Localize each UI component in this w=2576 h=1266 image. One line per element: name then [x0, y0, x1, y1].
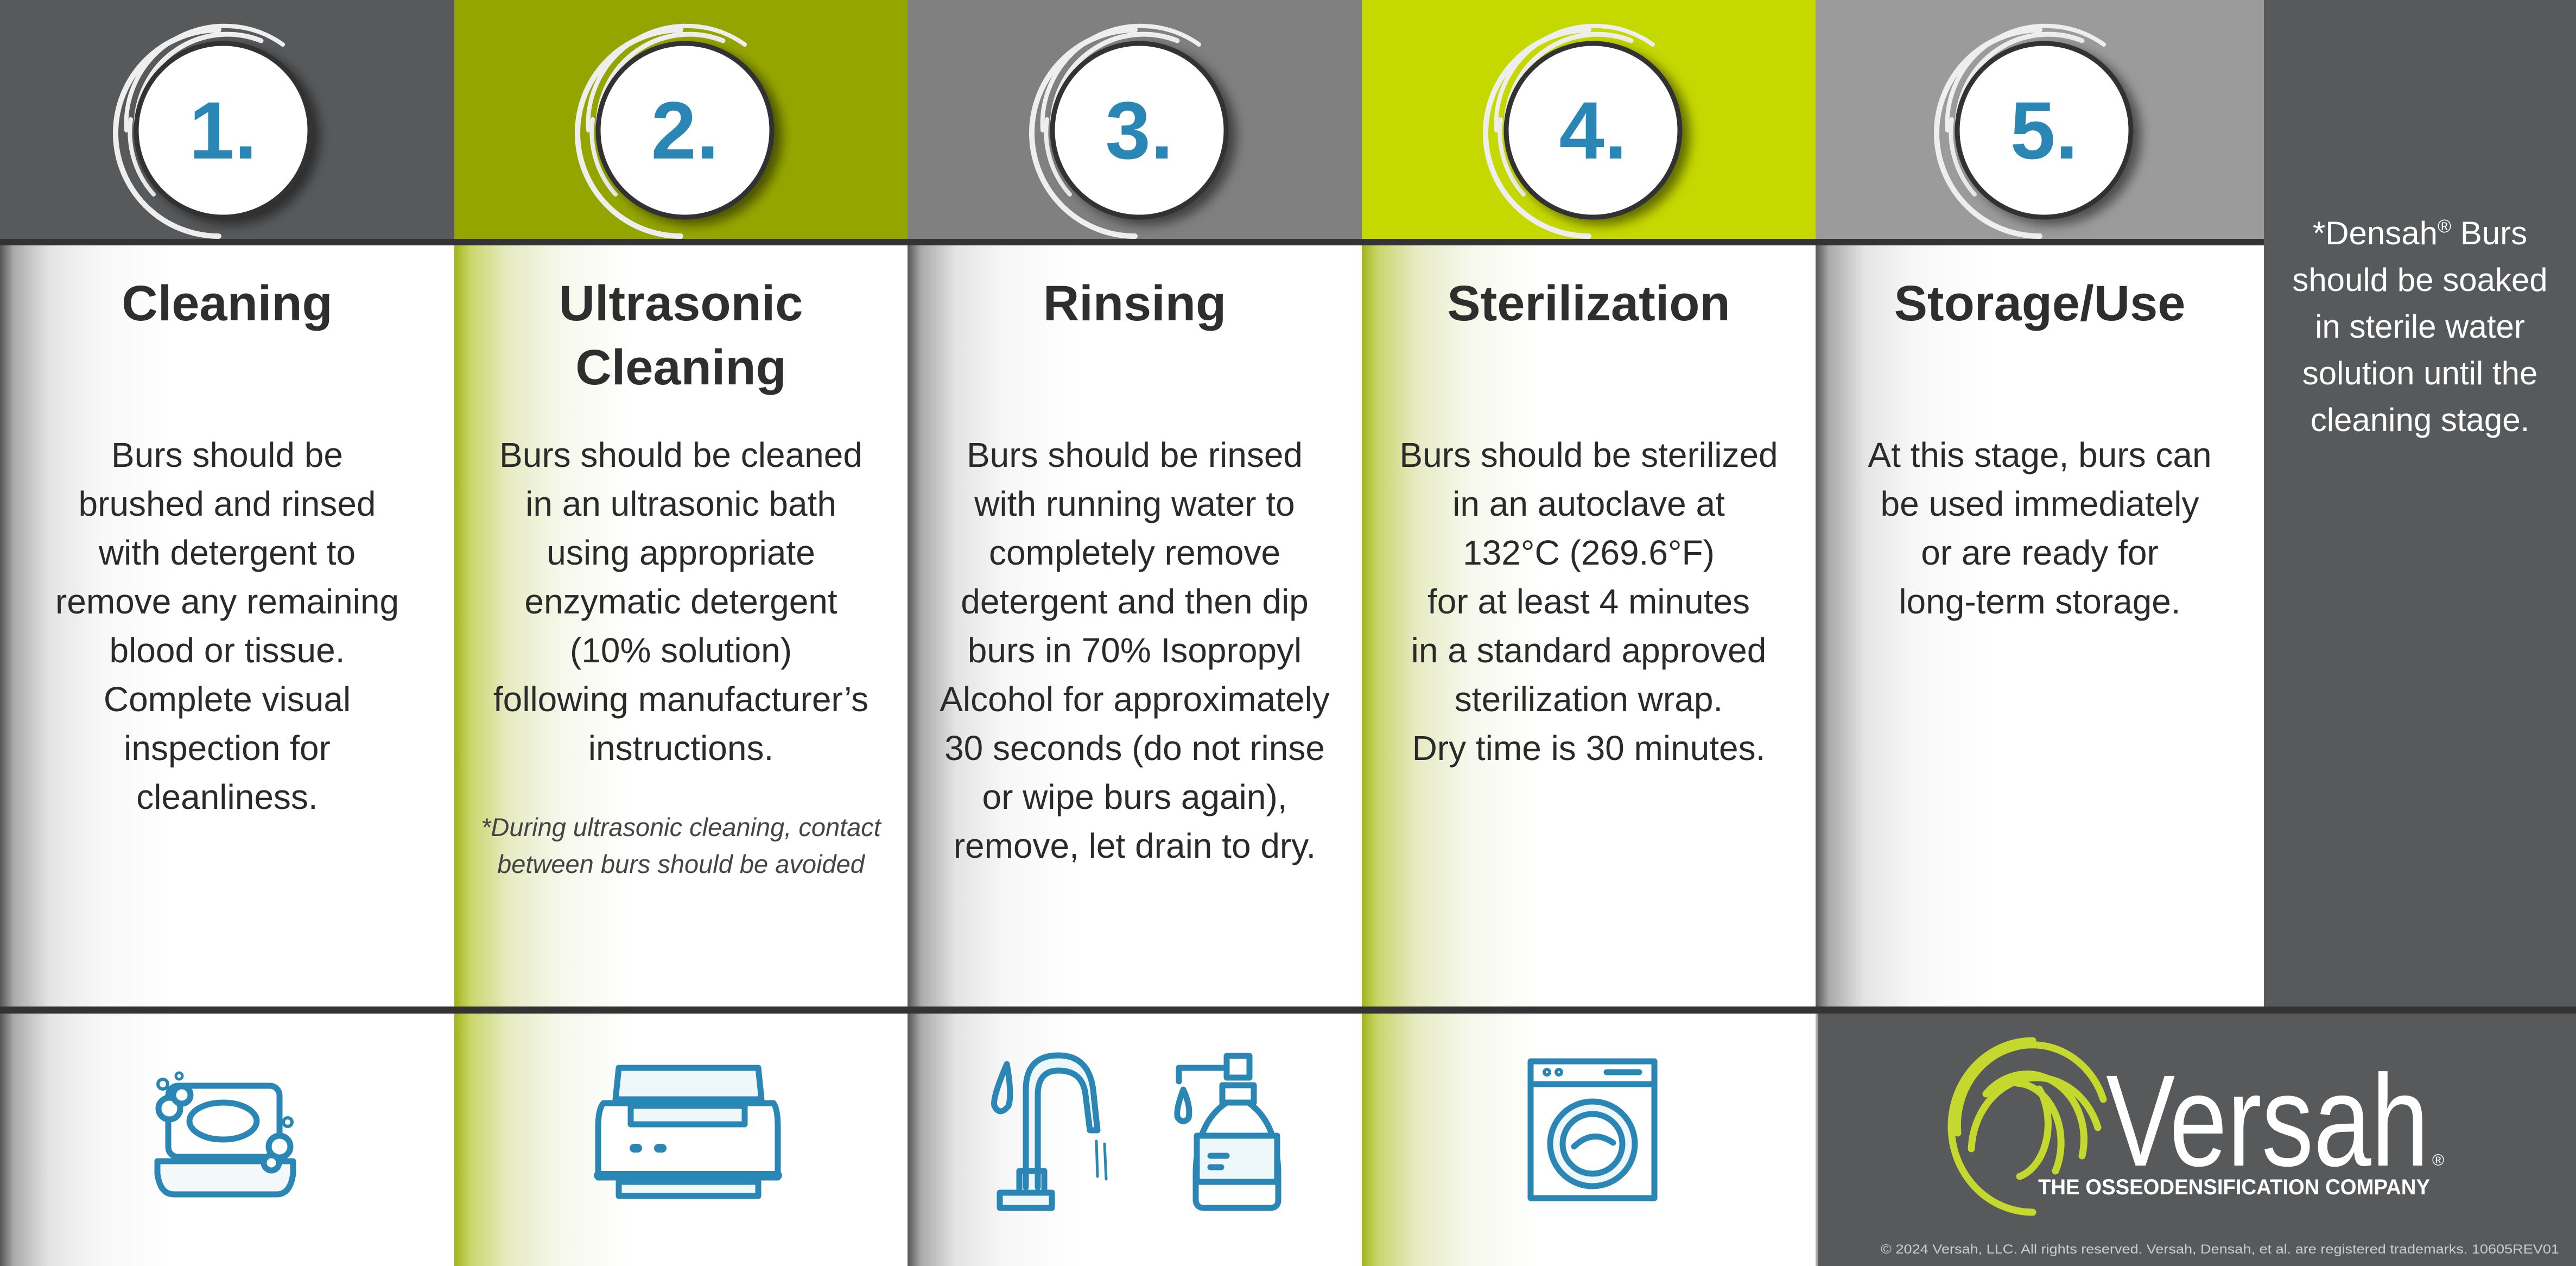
text: rinsing: or wipe burs again), — [982, 777, 1287, 816]
text: ultrasonic: (10% solution) — [570, 631, 792, 670]
dark divider top — [0, 239, 2264, 245]
text: cleaning: blood or tissue. — [109, 631, 345, 670]
bottom logo panel — [1816, 1014, 2576, 1266]
badge 3 — [1032, 26, 1226, 236]
text: sterilization: in an autoclave at — [1452, 484, 1725, 523]
title: Storage/Use: Storage/Use — [1894, 276, 2185, 331]
sidebar note — [2292, 215, 2548, 438]
body columns — [0, 245, 454, 1007]
text: cleaning: Complete visual — [104, 680, 351, 719]
icon: bottle — [1177, 1056, 1278, 1208]
sidebar note: cleaning stage. — [2311, 402, 2529, 438]
text: rinsing: with running water to — [974, 484, 1295, 523]
icons — [154, 1052, 1658, 1211]
badge 4 — [1486, 26, 1680, 236]
text: ultrasonic: in an ultrasonic bath — [525, 484, 836, 523]
badge 1 — [116, 26, 310, 236]
sidebar note: *Densah® Burs — [2313, 215, 2527, 251]
icon: autoclave / washing machine — [1531, 1061, 1654, 1198]
text: ultrasonic: instructions. — [588, 729, 773, 768]
text: storage: At this stage, burs can — [1868, 435, 2212, 474]
text: storage: long-term storage. — [1899, 582, 2181, 621]
text: storage: or are ready for — [1921, 533, 2159, 572]
text: cleaning: inspection for — [124, 729, 331, 768]
header: column 3 — [908, 0, 1362, 239]
badge 2: 2. — [651, 85, 719, 176]
text: cleaning: remove any remaining — [55, 582, 399, 621]
badge 2 — [578, 26, 772, 236]
text: rinsing: completely remove — [989, 533, 1280, 572]
text: cleaning: Burs should be — [111, 435, 343, 474]
text: rinsing: burs in 70% Isopropyl — [968, 631, 1302, 670]
icon: soap — [157, 1073, 293, 1194]
number badges — [113, 24, 2147, 239]
badge 5: 5. — [2010, 85, 2078, 176]
text: sterilization: sterilization wrap. — [1455, 680, 1723, 719]
badge 5 — [1937, 26, 2131, 236]
text: cleaning — [55, 435, 399, 816]
header: column 1 — [0, 0, 454, 239]
text: ultrasonic: following manufacturer’s — [493, 680, 868, 719]
text: sterilization: 132°C (269.6°F) — [1463, 533, 1715, 572]
text: storage — [1868, 435, 2212, 621]
title: Rinsing: Rinsing — [1043, 276, 1226, 331]
footnote: ultrasonic: *During ultrasonic cleaning, contact — [481, 813, 881, 841]
text: cleaning: brushed and rinsed — [79, 484, 376, 523]
text: rinsing: detergent and then dip — [961, 582, 1309, 621]
text: ultrasonic: using appropriate — [547, 533, 815, 572]
bottom columns — [0, 1014, 454, 1266]
text: cleaning: cleanliness. — [136, 777, 318, 816]
sidebar note: solution until the — [2302, 355, 2537, 391]
text: rinsing: remove, let drain to dry. — [954, 826, 1316, 865]
sidebar note: in sterile water — [2315, 308, 2525, 345]
footnote: ultrasonic — [481, 813, 881, 878]
title: Sterilization: Sterilization — [1447, 276, 1730, 331]
text: ultrasonic — [493, 435, 868, 768]
badge 4: 4. — [1559, 85, 1627, 176]
text: rinsing: Alcohol for approximately — [940, 680, 1330, 719]
title: Cleaning: Cleaning — [122, 276, 333, 331]
text: ultrasonic: Burs should be cleaned — [499, 435, 862, 474]
text: storage: be used immediately — [1881, 484, 2199, 523]
sidebar note: should be soaked — [2292, 262, 2548, 298]
header: column 5 — [1816, 0, 2264, 239]
badge 3: 3. — [1105, 85, 1173, 176]
icon: ultrasonic bath — [598, 1068, 778, 1196]
logo wordmark: Versah — [2106, 1048, 2429, 1193]
icon: faucet — [994, 1055, 1106, 1208]
text: sterilization: Burs should be sterilized — [1399, 435, 1778, 474]
copyright: © 2024 Versah, LLC. All rights reserved. Versah, Densah, et al. are registered trademarks. 10605REV01 — [1881, 1242, 2559, 1257]
sidebar background — [2264, 0, 2576, 1007]
text: ultrasonic: enzymatic detergent — [524, 582, 837, 621]
dark divider bottom — [0, 1007, 2576, 1014]
text: sterilization: Dry time is 30 minutes. — [1412, 729, 1765, 768]
text: rinsing — [940, 435, 1330, 865]
text: rinsing: 30 seconds (do not rinse — [944, 729, 1325, 768]
logo: ® — [2432, 1151, 2444, 1169]
footnote: ultrasonic: between burs should be avoided — [497, 850, 865, 878]
text: sterilization: for at least 4 minutes — [1427, 582, 1750, 621]
text: sterilization — [1399, 435, 1778, 768]
header: column 4 — [1362, 0, 1816, 239]
text: sterilization: in a standard approved — [1411, 631, 1766, 670]
text: cleaning: with detergent to — [99, 533, 356, 572]
title: Ultrasonic Cleaning — [559, 276, 803, 395]
logo tagline: THE OSSEODENSIFICATION COMPANY — [2038, 1175, 2430, 1199]
header: column 2 — [454, 0, 908, 239]
title: Ultrasonic Cleaning: Cleaning — [575, 340, 786, 395]
text: rinsing: Burs should be rinsed — [967, 435, 1303, 474]
logo swoosh — [1951, 1041, 2103, 1212]
badge 1: 1. — [189, 85, 257, 176]
logo — [1881, 1037, 2559, 1257]
title: Ultrasonic Cleaning: Ultrasonic — [559, 276, 803, 331]
